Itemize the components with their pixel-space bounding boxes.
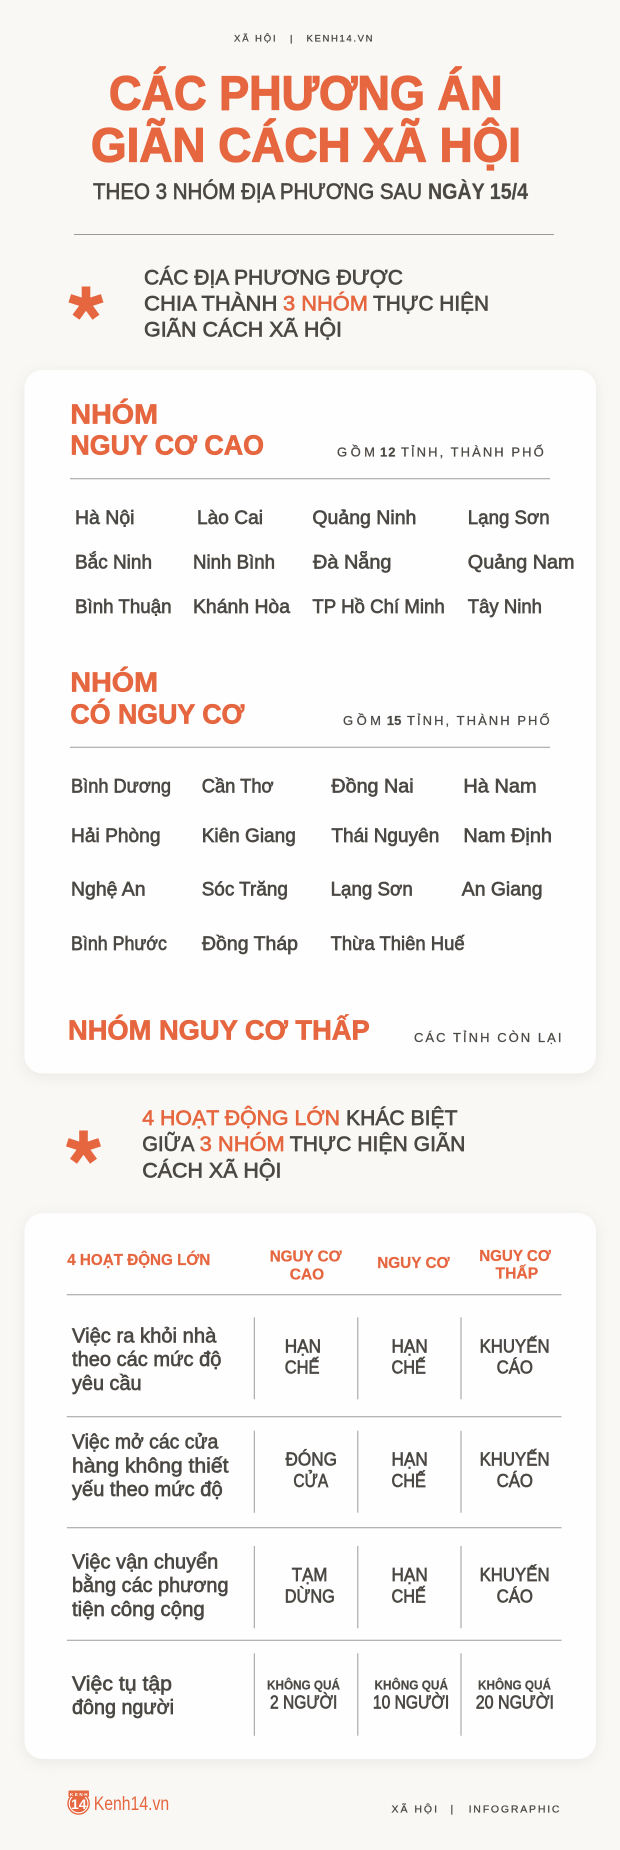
row: opening non-essential shops: CÁO	[497, 1470, 533, 1491]
intro text	[144, 266, 489, 342]
row: opening non-essential shops: Việc mở các cửa	[72, 1431, 219, 1454]
row: public transport: HẠN	[392, 1564, 428, 1585]
list: high risk provinces: Quảng Nam	[468, 552, 574, 574]
list: risk provinces: Đồng Nai	[331, 775, 414, 797]
list: risk provinces: Lạng Sơn	[331, 878, 413, 900]
subtitle: THEO 3 NHÓM ĐỊA PHƯƠNG SAU	[93, 179, 422, 204]
list: high risk provinces	[75, 507, 574, 618]
row: gatherings: KHÔNG QUÁ	[478, 1677, 551, 1692]
heading: low risk group: NHÓM NGUY CƠ THẤP	[68, 1014, 370, 1045]
count: 12 provinces: TỈNH, THÀNH PHỐ	[401, 444, 544, 459]
row: public transport: KHUYẾN	[480, 1564, 550, 1585]
header tagline: |	[290, 34, 292, 45]
row: public transport	[72, 1546, 550, 1628]
row: leaving home: KHUYẾN	[480, 1335, 550, 1356]
list: risk provinces: Đồng Tháp	[202, 933, 298, 955]
list: high risk provinces: Lạng Sơn	[468, 507, 550, 529]
table header: CAO	[290, 1266, 324, 1283]
list: high risk provinces: Quảng Ninh	[312, 507, 416, 529]
section text: 4 major activities: KHÁC BIỆT	[346, 1107, 458, 1130]
section text: 4 major activities: THỰC HIỆN GIÃN	[290, 1132, 465, 1156]
logo: Kenh14	[68, 1790, 169, 1815]
intro text: GIÃN CÁCH XÃ HỘI	[144, 318, 342, 342]
intro text: CÁC ĐỊA PHƯƠNG ĐƯỢC	[144, 266, 403, 289]
row: gatherings	[72, 1653, 554, 1736]
panel: comparison table	[24, 1213, 596, 1759]
title: GIÃN CÁCH XÃ HỘI	[91, 118, 521, 173]
list: risk provinces: An Giang	[462, 878, 542, 900]
section text: 4 major activities: 4 HOẠT ĐỘNG LỚN	[142, 1107, 340, 1130]
row: leaving home: Việc ra khỏi nhà	[72, 1325, 217, 1348]
icon: asterisk	[69, 286, 103, 320]
section text: 4 major activities: CÁCH XÃ HỘI	[142, 1158, 282, 1182]
section text: 4 major activities: GIỮA	[142, 1132, 194, 1156]
list: high risk provinces: Tây Ninh	[468, 596, 542, 618]
count: 12 provinces: 12	[380, 444, 396, 459]
row: public transport: bằng các phương	[72, 1574, 228, 1597]
logo: Kenh14: KENH	[70, 1792, 88, 1797]
count: 12 provinces	[337, 444, 544, 459]
row: public transport: Việc vận chuyển	[72, 1550, 218, 1573]
footer tagline: XÃ HỘI	[392, 1802, 437, 1815]
row: gatherings: KHÔNG QUÁ	[374, 1677, 448, 1692]
list: risk provinces: Hà Nam	[463, 775, 537, 797]
note: remaining provinces: CÁC TỈNH CÒN LẠI	[414, 1030, 562, 1045]
list: high risk provinces: Khánh Hòa	[193, 596, 290, 618]
row: opening non-essential shops: CỬA	[293, 1470, 329, 1491]
table header: NGUY CƠ	[377, 1255, 450, 1272]
row: leaving home: CÁO	[497, 1357, 533, 1378]
row: opening non-essential shops: KHUYẾN	[480, 1449, 550, 1470]
list: high risk provinces: TP Hồ Chí Minh	[312, 596, 445, 618]
list: high risk provinces: Bình Thuận	[75, 596, 172, 618]
count: 15 provinces: TỈNH, THÀNH PHỐ	[407, 713, 550, 728]
row: leaving home: theo các mức độ	[72, 1348, 221, 1371]
list: high risk provinces: Đà Nẵng	[313, 551, 392, 574]
row: leaving home: CHẾ	[392, 1357, 426, 1378]
heading: high risk group: NGUY CƠ CAO	[70, 430, 264, 461]
intro text: CHIA THÀNH	[144, 293, 278, 316]
heading: risk group: CÓ NGUY CƠ	[70, 698, 245, 729]
list: high risk provinces: Lào Cai	[197, 507, 263, 529]
section text: 4 major activities: 3 NHÓM	[200, 1133, 285, 1156]
list: risk provinces: Kiên Giang	[202, 825, 296, 847]
count: 15 provinces: GỒM	[343, 713, 381, 728]
list: risk provinces: Thừa Thiên Huế	[331, 933, 465, 955]
subtitle: NGÀY 15/4	[428, 179, 529, 204]
table header: NGUY CƠ	[479, 1248, 551, 1265]
heading: high risk group: NHÓM	[70, 398, 158, 429]
intro text: 3 NHÓM	[283, 293, 368, 316]
list: high risk provinces: Hà Nội	[75, 507, 134, 529]
table header: 4 HOẠT ĐỘNG LỚN	[67, 1250, 210, 1269]
section text: 4 major activities	[142, 1107, 465, 1182]
list: risk provinces: Sóc Trăng	[202, 878, 288, 900]
list: risk provinces: Thái Nguyên	[331, 825, 439, 847]
icon: asterisk	[66, 1130, 101, 1164]
list: high risk provinces: Bắc Ninh	[75, 551, 152, 574]
logo: Kenh14: Kenh14.vn	[94, 1794, 169, 1815]
list: risk provinces: Bình Phước	[71, 933, 167, 955]
logo: Kenh14: 14	[71, 1796, 87, 1812]
row: leaving home: HẠN	[285, 1335, 321, 1356]
panel: risk groups	[24, 370, 596, 1074]
row: leaving home: yêu cầu	[72, 1372, 142, 1395]
row: opening non-essential shops	[72, 1431, 550, 1513]
header tagline: KENH14.VN	[306, 34, 373, 45]
footer tagline: INFOGRAPHIC	[469, 1803, 560, 1815]
footer tagline: |	[450, 1803, 453, 1815]
list: risk provinces: Nam Định	[463, 825, 552, 847]
heading: risk group	[70, 667, 245, 729]
row: public transport: CHẾ	[392, 1586, 426, 1607]
header tagline: XÃ HỘI	[234, 34, 276, 45]
row: gatherings: 20 NGƯỜI	[476, 1691, 554, 1712]
title	[91, 66, 521, 173]
row: public transport: tiện công cộng	[72, 1598, 205, 1621]
count: 15 provinces: 15	[387, 713, 401, 728]
row: gatherings: Việc tụ tập	[72, 1673, 172, 1696]
row: opening non-essential shops: yếu theo mức độ	[72, 1478, 223, 1501]
table header: NGUY CƠ	[270, 1248, 342, 1265]
row: leaving home: CHẾ	[285, 1357, 320, 1378]
list: risk provinces: Nghệ An	[71, 878, 146, 900]
count: 15 provinces	[343, 713, 550, 728]
heading: risk group: NHÓM	[70, 667, 158, 698]
footer tagline	[392, 1802, 560, 1815]
row: gatherings: đông người	[72, 1696, 174, 1719]
list: risk provinces: Cần Thơ	[202, 775, 274, 797]
table header: THẤP	[496, 1264, 539, 1283]
table header	[67, 1248, 551, 1283]
row: opening non-essential shops: hàng không thiết	[72, 1454, 229, 1477]
title: CÁC PHƯƠNG ÁN	[109, 66, 502, 120]
row: public transport: TẠM	[292, 1564, 327, 1585]
list: risk provinces: Hải Phòng	[71, 825, 160, 847]
row: opening non-essential shops: CHẾ	[392, 1470, 426, 1491]
row: gatherings: 2 NGƯỜI	[270, 1691, 337, 1712]
list: risk provinces	[71, 775, 552, 955]
list: high risk provinces: Ninh Bình	[193, 552, 275, 574]
intro text: THỰC HIỆN	[373, 293, 489, 316]
row: leaving home	[72, 1317, 550, 1399]
row: leaving home: HẠN	[392, 1335, 428, 1356]
list: risk provinces: Bình Dương	[71, 775, 171, 797]
header tagline	[234, 34, 373, 45]
row: opening non-essential shops: HẠN	[392, 1449, 428, 1470]
heading: high risk group	[70, 398, 264, 461]
row: gatherings: 10 NGƯỜI	[373, 1691, 449, 1712]
count: 12 provinces: GỒM	[337, 444, 375, 459]
row: public transport: CÁO	[497, 1586, 533, 1607]
row: opening non-essential shops: ĐÓNG	[286, 1449, 337, 1470]
row: public transport: DỪNG	[285, 1586, 335, 1607]
row: gatherings: KHÔNG QUÁ	[267, 1677, 340, 1692]
